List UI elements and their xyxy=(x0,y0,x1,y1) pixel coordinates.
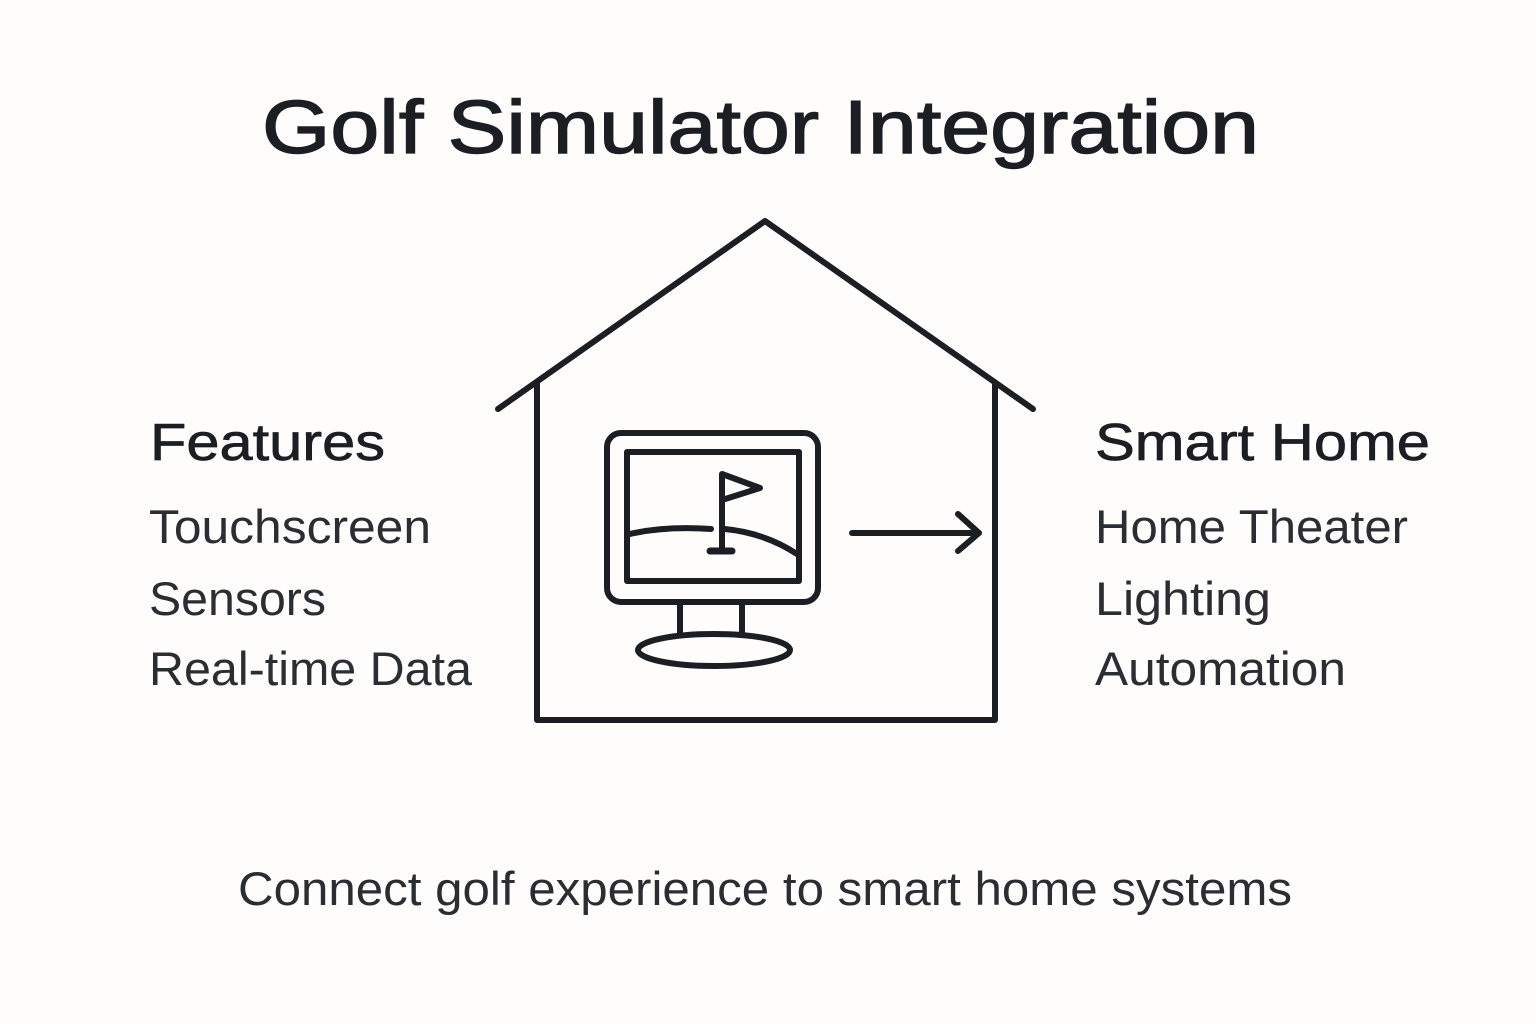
monitor frame xyxy=(607,433,818,602)
features list: Touchscreen xyxy=(149,500,431,553)
icon: monitor with golf flag xyxy=(607,433,818,666)
panel: features xyxy=(149,414,473,695)
smart home list: Automation xyxy=(1095,642,1346,695)
green contour xyxy=(630,528,797,554)
smart home list xyxy=(1095,500,1408,695)
golf flag xyxy=(710,474,760,551)
caption: Connect golf experience to smart home systems xyxy=(238,862,1292,915)
features list: Sensors xyxy=(149,572,326,625)
icon: house outline xyxy=(498,221,1033,720)
features list: Real-time Data xyxy=(149,642,473,695)
monitor base xyxy=(638,634,790,666)
smart home list: Lighting xyxy=(1095,572,1271,625)
smart home list: Home Theater xyxy=(1095,500,1408,553)
monitor screen xyxy=(627,452,799,581)
heading: features: Features xyxy=(150,414,385,472)
title: Golf Simulator Integration xyxy=(262,85,1259,169)
monitor stand xyxy=(680,603,742,634)
panel: smart home xyxy=(1095,414,1430,695)
features list xyxy=(149,500,473,695)
heading: smart home: Smart Home xyxy=(1095,414,1430,472)
arrow to smart home xyxy=(852,514,979,551)
